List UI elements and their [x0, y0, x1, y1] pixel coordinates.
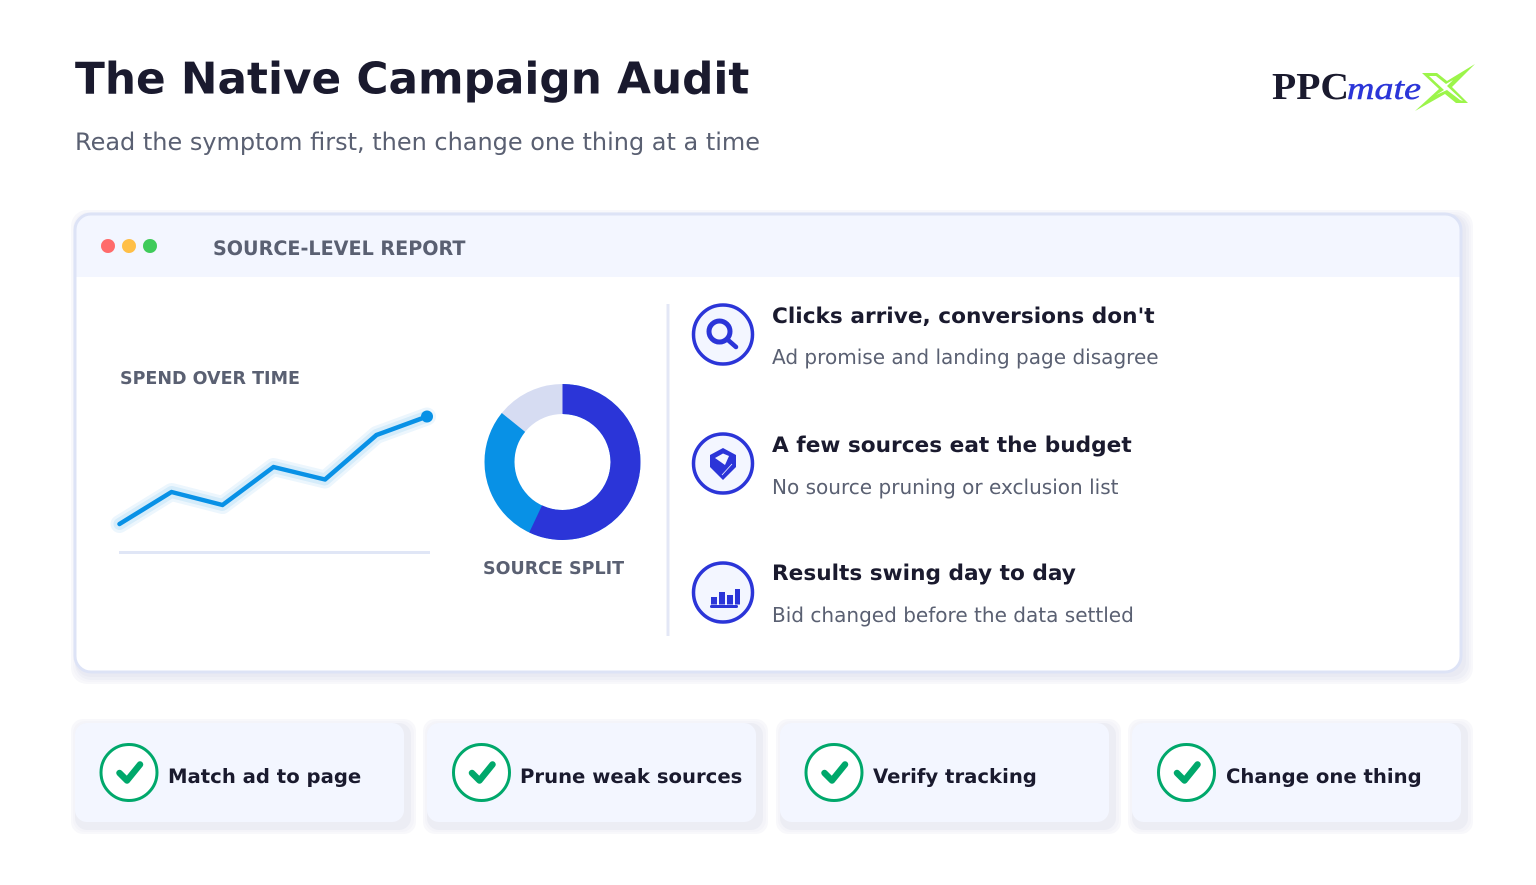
symptom 1 [694, 304, 1159, 369]
label: Change one thing [1226, 765, 1422, 788]
subtitle: Read the symptom first, then change one thing at a time [75, 128, 760, 156]
logo: PPCmate X [1272, 64, 1475, 111]
icon: shield [694, 434, 752, 493]
symptom 3 heading: Results swing day to day [772, 561, 1076, 586]
line chart: spend over time [119, 369, 433, 552]
symptom 1 detail: Ad promise and landing page disagree [772, 345, 1159, 369]
symptom 2 detail: No source pruning or exclusion list [772, 475, 1119, 499]
action card: verify tracking [776, 719, 1121, 834]
chart label: SPEND OVER TIME [120, 369, 300, 389]
label: Verify tracking [873, 765, 1037, 788]
symptom 3 [694, 561, 1134, 627]
icon: check [454, 744, 510, 800]
panel: source-level report [71, 210, 1473, 684]
action card: match ad to page [71, 719, 416, 834]
donut chart: source split [483, 399, 626, 579]
icon: check [1158, 744, 1214, 800]
symptom 2 heading: A few sources eat the budget [772, 433, 1132, 458]
symptom 1 heading: Clicks arrive, conversions don't [772, 304, 1155, 329]
icon: bar chart [694, 563, 752, 622]
label: Prune weak sources [520, 765, 742, 788]
action card: prune weak sources [423, 719, 768, 834]
panel header label: SOURCE-LEVEL REPORT [213, 237, 465, 260]
symptom 3 detail: Bid changed before the data settled [772, 603, 1134, 627]
icon: check [806, 744, 862, 800]
action card: change one thing [1128, 719, 1473, 834]
title: The Native Campaign Audit [75, 54, 749, 104]
panel header bar [75, 214, 1461, 277]
icon: magnifier [694, 305, 752, 364]
chart label: SOURCE SPLIT [483, 559, 624, 579]
label: Match ad to page [168, 765, 361, 788]
icon: check [101, 744, 157, 800]
window control dots [101, 239, 157, 253]
symptom 2 [694, 433, 1132, 499]
logo: PPCmate X: mate [1347, 70, 1421, 106]
logo: PPCmate X: PPC [1272, 66, 1349, 108]
